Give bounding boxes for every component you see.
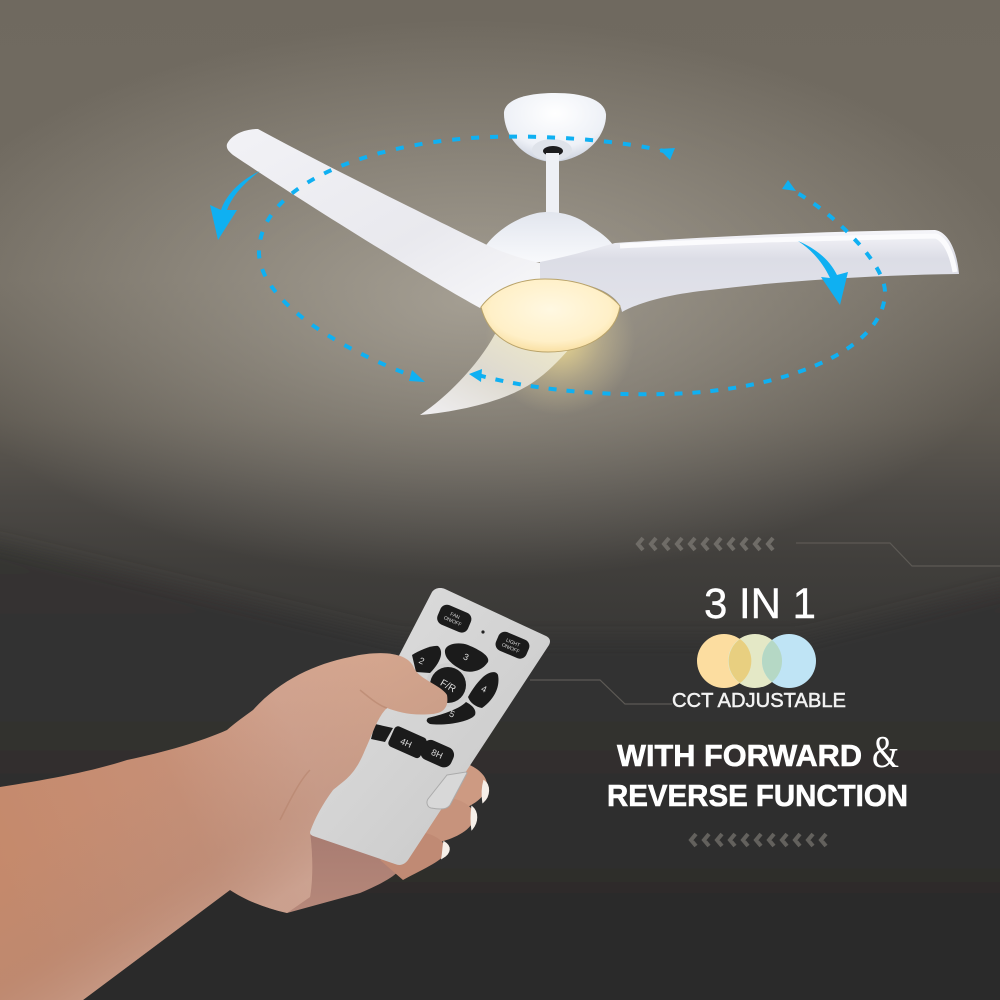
headline: with forward & reverse function: & bbox=[872, 726, 899, 777]
button labels: 3 bbox=[462, 651, 470, 663]
glowing lamp bbox=[481, 279, 620, 352]
remote body bbox=[309, 588, 550, 865]
button labels: ON/OFF bbox=[501, 642, 520, 655]
bottom chevron row bbox=[691, 834, 826, 846]
headline: with forward & reverse function: REVERSE FUNCTION bbox=[607, 778, 908, 813]
palm and thumb over remote bbox=[0, 653, 447, 1000]
button labels: 5 bbox=[448, 708, 456, 720]
headline: with forward & reverse function: WITH FORWARD bbox=[617, 738, 862, 773]
dashed orbit: lower right bbox=[478, 190, 885, 394]
button labels: 4H bbox=[399, 736, 413, 750]
down rod bbox=[546, 153, 559, 217]
left blade bbox=[227, 129, 540, 308]
button labels bbox=[399, 611, 521, 761]
button labels: F/R bbox=[438, 678, 457, 695]
d-pad ring bbox=[426, 663, 470, 707]
blade rim highlight bbox=[620, 236, 955, 272]
curved arrow: left bbox=[210, 171, 260, 240]
timer buttons bbox=[387, 725, 457, 770]
top buttons bbox=[435, 603, 532, 661]
d-pad buttons bbox=[371, 643, 498, 742]
headline: with forward & reverse function bbox=[607, 726, 908, 813]
arrowheads bbox=[409, 148, 796, 382]
hand base with fingers bbox=[287, 762, 488, 913]
button labels: 8H bbox=[430, 747, 444, 761]
ceiling fan bbox=[227, 93, 959, 415]
ceiling mount bbox=[504, 93, 606, 162]
warm light glow bbox=[485, 265, 635, 415]
CCT colour circles bbox=[697, 634, 816, 688]
rotation arrows bbox=[210, 137, 885, 394]
button labels: 4 bbox=[480, 683, 488, 695]
decorative circuit lines bbox=[530, 543, 1000, 704]
hand holding remote bbox=[0, 588, 550, 1000]
remote control bbox=[309, 588, 550, 865]
heading: 3 in 1: 3 IN 1 bbox=[704, 580, 816, 628]
motor dome bbox=[484, 212, 613, 262]
button labels: 2 bbox=[417, 655, 426, 667]
button labels: ON/OFF bbox=[443, 615, 462, 628]
lower blade bbox=[420, 334, 570, 415]
battery clip bbox=[427, 772, 467, 809]
button labels: FAN bbox=[449, 611, 461, 621]
dashed orbit: upper left bbox=[259, 137, 668, 378]
indicator dot bbox=[481, 630, 485, 634]
right blade bbox=[540, 230, 959, 312]
label: CCT adjustable: CCT ADJUSTABLE bbox=[672, 690, 846, 712]
curved arrow: right bbox=[798, 241, 848, 305]
top chevron row bbox=[638, 538, 773, 550]
button labels: LIGHT bbox=[505, 638, 521, 649]
